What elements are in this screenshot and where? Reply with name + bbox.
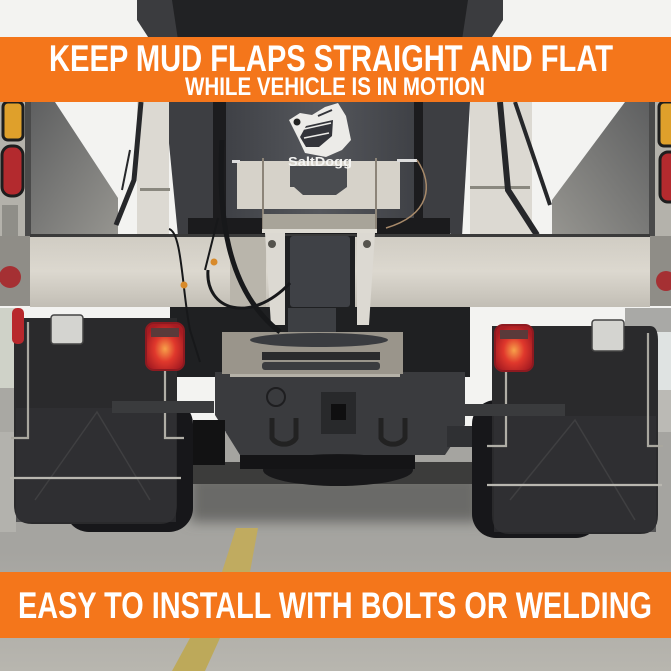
distant background objects (0, 308, 671, 470)
wire connectors (180, 258, 218, 288)
right dump body wall (470, 102, 671, 236)
steel controller box (232, 158, 426, 233)
straps (116, 102, 550, 235)
SaltDogg logo (288, 103, 352, 169)
bottom orange banner (0, 572, 671, 638)
left dump body wall (0, 102, 170, 250)
steel crossbar (0, 234, 671, 307)
right mud flap (465, 326, 663, 534)
wiring (169, 140, 290, 362)
left tire (65, 400, 193, 532)
banner subheading: WHILE VEHICLE IS IN MOTION (185, 73, 485, 101)
spreader top (137, 0, 503, 236)
bracket assembly (265, 233, 375, 325)
left mud flap (10, 318, 214, 524)
right tire (472, 400, 600, 538)
ground (0, 432, 671, 671)
chassis center (170, 307, 492, 486)
upper tail lights (2, 102, 671, 202)
brand name: SaltDogg (288, 154, 352, 169)
top orange banner (0, 37, 671, 102)
lower tail lights and work lamps (12, 308, 624, 371)
